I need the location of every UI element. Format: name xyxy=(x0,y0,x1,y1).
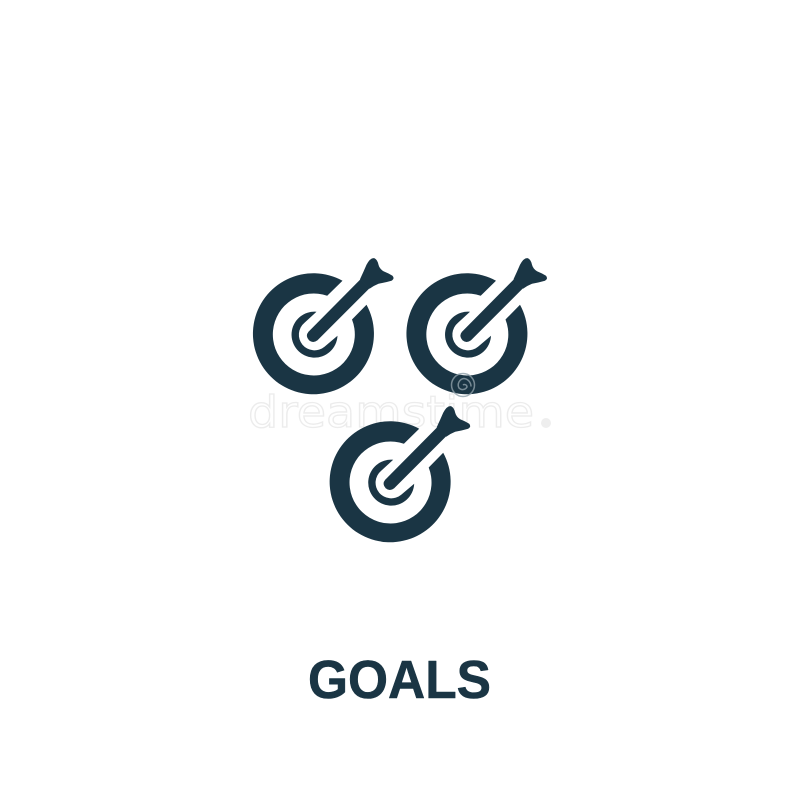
icon: target with arrow, bottom centre xyxy=(330,406,470,542)
icon: target with arrow, top right xyxy=(406,258,547,394)
icon: target with arrow, top left xyxy=(253,258,394,394)
watermark spiral xyxy=(452,374,474,396)
title: GOALS xyxy=(308,650,491,710)
watermark: dreamstime xyxy=(248,387,534,438)
